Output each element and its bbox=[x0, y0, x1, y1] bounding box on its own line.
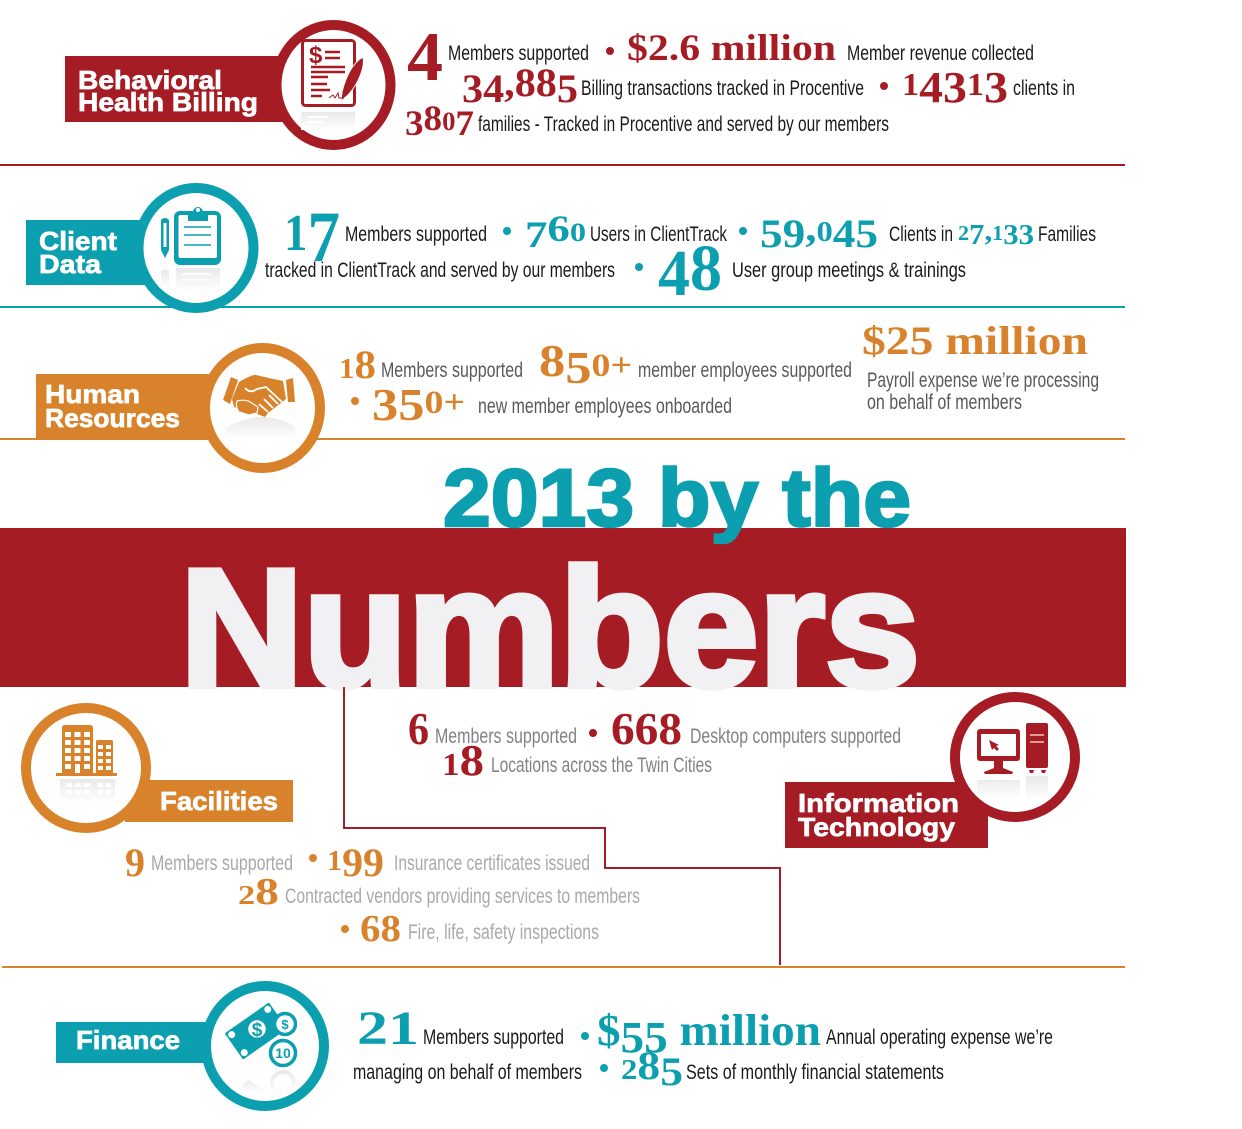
stat: 28 vendors: Contracted vendors providing services to members bbox=[285, 885, 640, 908]
stat: 34,885 transactions bbox=[462, 60, 864, 111]
stat: $25 million payroll bbox=[862, 318, 1099, 414]
stat: 21 members supported: Members supported bbox=[423, 1026, 564, 1049]
badge: information technology: Information bbox=[798, 788, 959, 818]
stat: $25 million payroll: $25 million bbox=[862, 318, 1088, 363]
badge: client data bbox=[26, 188, 254, 308]
stat: 4 members supported bbox=[407, 19, 589, 96]
stat: 48 user group meetings bbox=[658, 232, 966, 310]
stat: $2.6 million revenue bbox=[627, 28, 1034, 69]
icon: money bbox=[225, 1002, 296, 1094]
title: Numbers bbox=[180, 534, 920, 722]
icon: desktop computer bbox=[977, 723, 1048, 800]
badge: behavioral health billing: Health Billing bbox=[78, 87, 258, 117]
badge: finance bbox=[56, 986, 324, 1106]
stat: $55 million operating expense: Annual operating expense we’re bbox=[826, 1026, 1053, 1049]
stat: 48 user group meetings: 48 bbox=[658, 232, 722, 310]
stat: 3807 families bbox=[405, 98, 889, 143]
stat: 350+ onboarded bbox=[372, 379, 732, 430]
title: 2013 by the bbox=[443, 453, 911, 544]
stat: 668 desktops: Desktop computers supported bbox=[690, 725, 901, 748]
stat: 59,045 clients in 27,133 families: tracked in ClientTrack and served by our members bbox=[265, 259, 615, 282]
stat: 350+ onboarded: new member employees onboarded bbox=[478, 395, 732, 418]
stat: 285 financial statements bbox=[621, 1043, 944, 1094]
stat: $2.6 million revenue: Member revenue collected bbox=[847, 42, 1034, 65]
icon: clipboard and pen bbox=[161, 207, 221, 292]
stat: 18 locations: Locations across the Twin Cities bbox=[491, 754, 712, 777]
icon: buildings bbox=[56, 725, 117, 803]
badge: human resources: Human bbox=[45, 379, 140, 409]
stat: 68 inspections: Fire, life, safety inspections bbox=[408, 921, 599, 944]
stat: 199 certificates bbox=[327, 840, 590, 885]
stat: 760 users: Users in ClientTrack bbox=[590, 223, 727, 246]
icon: signed document: $ bbox=[309, 42, 323, 69]
stat: 9 members supported: Members supported bbox=[151, 852, 293, 875]
stat: 850+ employees: 850+ bbox=[539, 335, 632, 393]
stat: 28 vendors bbox=[238, 871, 640, 913]
stat: 59,045 clients in 27,133 families bbox=[265, 205, 1096, 282]
stat: $55 million operating expense bbox=[353, 1006, 1053, 1084]
stat: 17 members supported bbox=[284, 197, 487, 277]
stat: 668 desktops: 668 bbox=[611, 703, 682, 754]
stat: $2.6 million revenue: $2.6 million bbox=[627, 28, 836, 69]
stat: 285 financial statements: 285 bbox=[621, 1043, 683, 1094]
stat: 17 members supported: Members supported bbox=[345, 223, 487, 246]
panel: finance bbox=[56, 986, 1053, 1106]
panel: client data bbox=[26, 188, 1096, 310]
stat: $25 million payroll: on behalf of members bbox=[867, 391, 1022, 414]
stat: 68 inspections bbox=[360, 908, 599, 950]
stat: 14313 clients: clients in bbox=[1013, 77, 1075, 100]
panel: information technology bbox=[408, 697, 1075, 848]
icon: money: $ bbox=[252, 1020, 263, 1041]
stat: 285 financial statements: Sets of monthly financial statements bbox=[686, 1061, 944, 1084]
stat: 34,885 transactions: 34,885 bbox=[462, 60, 578, 111]
badge: behavioral health billing: Behavioral bbox=[78, 65, 222, 95]
stat: 68 inspections: 68 bbox=[360, 908, 401, 950]
stat: 668 desktops bbox=[611, 703, 901, 754]
panel: human resources bbox=[36, 318, 1099, 468]
stat: 59,045 clients in 27,133 families: Clients in bbox=[889, 223, 953, 246]
stat: $55 million operating expense: $55 million bbox=[597, 1006, 821, 1062]
stat: 21 members supported bbox=[357, 1003, 564, 1055]
stat: 6 members supported bbox=[408, 703, 577, 754]
stat: 59,045 clients in 27,133 families: Families bbox=[1038, 223, 1096, 246]
badge: information technology bbox=[785, 697, 1075, 848]
stat: 199 certificates: 199 bbox=[327, 840, 384, 885]
icon: signed document bbox=[301, 40, 363, 130]
stat: 18 members supported: Members supported bbox=[381, 359, 523, 382]
stat: 9 members supported: 9 bbox=[125, 840, 145, 885]
badge: human resources bbox=[36, 348, 320, 468]
stat: 14313 clients: 14313 bbox=[902, 63, 1008, 112]
stat: 48 user group meetings: User group meetings & trainings bbox=[732, 259, 966, 282]
stat: 17 members supported: 17 bbox=[284, 197, 340, 277]
badge: finance: Finance bbox=[76, 1025, 180, 1055]
badge: behavioral health billing bbox=[65, 25, 390, 145]
stat: 59,045 clients in 27,133 families: 27,133 bbox=[958, 215, 1034, 251]
stat: 9 members supported bbox=[125, 840, 293, 885]
stat: 760 users: 760 bbox=[525, 209, 586, 256]
stat: 28 vendors: 28 bbox=[238, 871, 279, 913]
badge: client data: Client bbox=[39, 226, 117, 256]
stat: 3807 families: families - Tracked in Procentive and served by our members bbox=[478, 113, 889, 136]
stat: 18 locations bbox=[442, 736, 712, 785]
badge: client data: Data bbox=[39, 249, 102, 279]
badge: human resources: Resources bbox=[45, 403, 180, 433]
stat: 760 users bbox=[525, 209, 727, 256]
panel: behavioral health billing bbox=[65, 19, 1075, 145]
badge: information technology: Technology bbox=[798, 812, 956, 842]
icon: handshake bbox=[223, 375, 295, 440]
stat: 18 locations: 18 bbox=[442, 736, 484, 785]
stat: 34,885 transactions: Billing transactions tracked in Procentive bbox=[581, 77, 864, 100]
stat: 18 members supported bbox=[339, 342, 523, 387]
stat: 3807 families: 3807 bbox=[405, 98, 474, 143]
panel: facilities bbox=[26, 708, 640, 950]
stat: 6 members supported: Members supported bbox=[435, 725, 577, 748]
stat: 18 members supported: 18 bbox=[339, 342, 376, 387]
stat: 59,045 clients in 27,133 families: 59,045 bbox=[760, 205, 878, 256]
icon: money: 10 bbox=[275, 1045, 291, 1061]
stat: 4 members supported: Members supported bbox=[448, 42, 589, 65]
icon: money: $ bbox=[281, 1017, 289, 1032]
stat: 199 certificates: Insurance certificates issued bbox=[394, 852, 590, 875]
title bbox=[0, 453, 1126, 722]
stat: 21 members supported: 21 bbox=[357, 1003, 419, 1055]
stat: 14313 clients bbox=[902, 63, 1075, 112]
stat: 6 members supported: 6 bbox=[408, 703, 429, 754]
stat: 350+ onboarded: 350+ bbox=[372, 379, 465, 430]
badge: facilities: Facilities bbox=[160, 786, 278, 816]
stat: 850+ employees: member employees supported bbox=[638, 359, 852, 382]
badge: facilities bbox=[26, 708, 293, 828]
stat: 850+ employees bbox=[539, 335, 852, 393]
stat: $25 million payroll: Payroll expense we’re processing bbox=[867, 369, 1099, 392]
stat: 4 members supported: 4 bbox=[407, 19, 443, 96]
stat: $55 million operating expense: managing on behalf of members bbox=[353, 1061, 582, 1084]
